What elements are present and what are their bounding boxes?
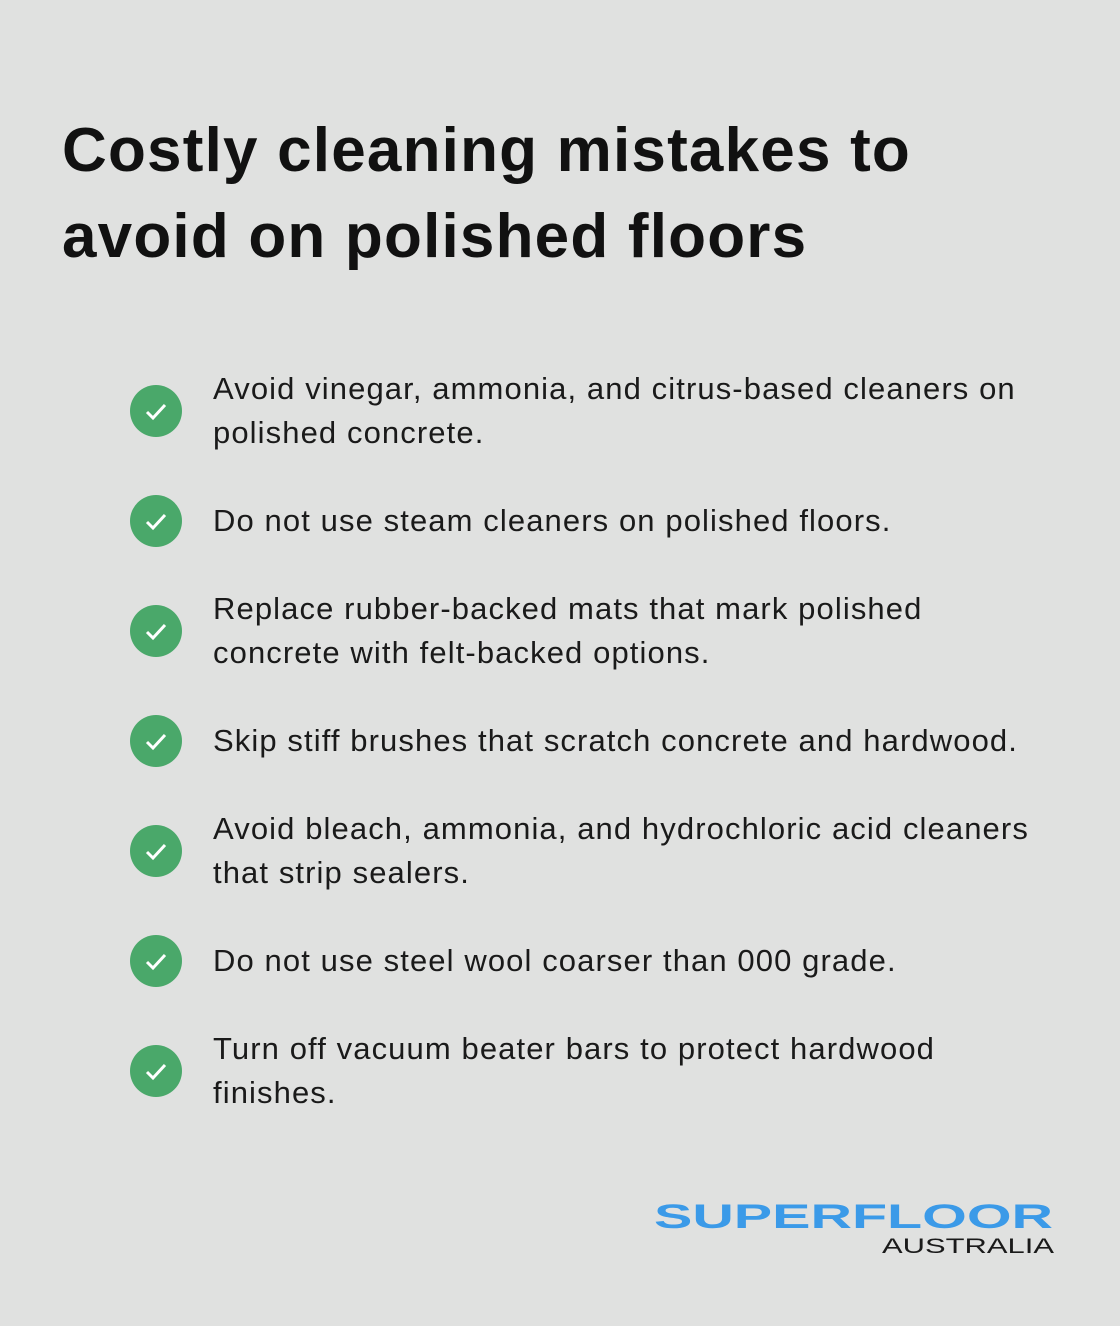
item 2: Do not use steam cleaners on polished floors. xyxy=(213,503,891,538)
item 5: that strip sealers. xyxy=(213,855,470,890)
item 7: finishes. xyxy=(213,1075,337,1110)
logo: AUSTRALIA xyxy=(882,1235,1054,1258)
title: Costly cleaning mistakes to xyxy=(62,116,911,185)
logo xyxy=(654,1198,1054,1258)
item 6 xyxy=(130,935,897,987)
title: avoid on polished floors xyxy=(62,202,807,271)
item 1: polished concrete. xyxy=(213,415,484,450)
item 3 xyxy=(130,591,922,670)
item 4: Skip stiff brushes that scratch concrete and hardwood. xyxy=(213,723,1018,758)
item 5: Avoid bleach, ammonia, and hydrochloric acid cleaners xyxy=(213,811,1029,846)
item 1 xyxy=(130,371,1016,450)
item 2 xyxy=(130,495,891,547)
logo: SUPERFLOOR xyxy=(654,1198,1053,1236)
item 3: Replace rubber-backed mats that mark polished xyxy=(213,591,922,626)
item 7: Turn off vacuum beater bars to protect hardwood xyxy=(213,1031,935,1066)
title xyxy=(62,116,911,271)
item 5 xyxy=(130,811,1029,890)
item 3: concrete with felt-backed options. xyxy=(213,635,710,670)
item 6: Do not use steel wool coarser than 000 grade. xyxy=(213,943,897,978)
item 4 xyxy=(130,715,1018,767)
item 1: Avoid vinegar, ammonia, and citrus-based cleaners on xyxy=(213,371,1016,406)
item 7 xyxy=(130,1031,935,1110)
